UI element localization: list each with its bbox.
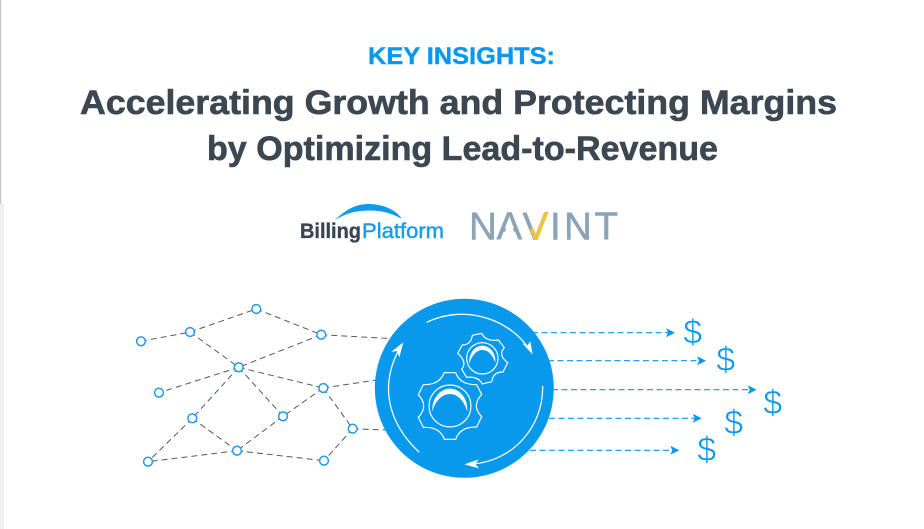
revenue arrows bbox=[530, 328, 757, 455]
title: by Optimizing Lead-to-Revenue bbox=[207, 130, 718, 168]
title bbox=[80, 84, 837, 168]
small gear bbox=[458, 333, 508, 384]
large gear bbox=[418, 373, 482, 439]
logo: BillingPlatform bbox=[300, 204, 444, 243]
eyebrow heading: key insights: KEY INSIGHTS: bbox=[368, 43, 555, 70]
cycle arrows bbox=[389, 314, 543, 468]
logo: Navint: V bbox=[522, 205, 548, 248]
logo: Navint bbox=[469, 205, 618, 248]
logo: BillingPlatform: Billing bbox=[300, 220, 361, 243]
logo: Navint: I bbox=[550, 205, 561, 248]
logo: Navint: T bbox=[594, 205, 618, 248]
logo: BillingPlatform: Platform bbox=[362, 220, 444, 243]
dollar signs: $ bbox=[724, 404, 743, 442]
logo: Navint: N bbox=[469, 205, 497, 248]
dollar signs: $ bbox=[697, 431, 716, 469]
dollar signs bbox=[683, 314, 782, 469]
central process circle with gears bbox=[375, 299, 554, 478]
dollar signs: $ bbox=[716, 341, 735, 379]
title: Accelerating Growth and Protecting Margins bbox=[80, 84, 837, 122]
logo: Navint: N bbox=[564, 205, 592, 248]
dollar signs: $ bbox=[763, 384, 782, 422]
network diagram bbox=[137, 305, 389, 466]
dollar signs: $ bbox=[683, 314, 702, 352]
logo: Navint: A bbox=[496, 205, 522, 248]
